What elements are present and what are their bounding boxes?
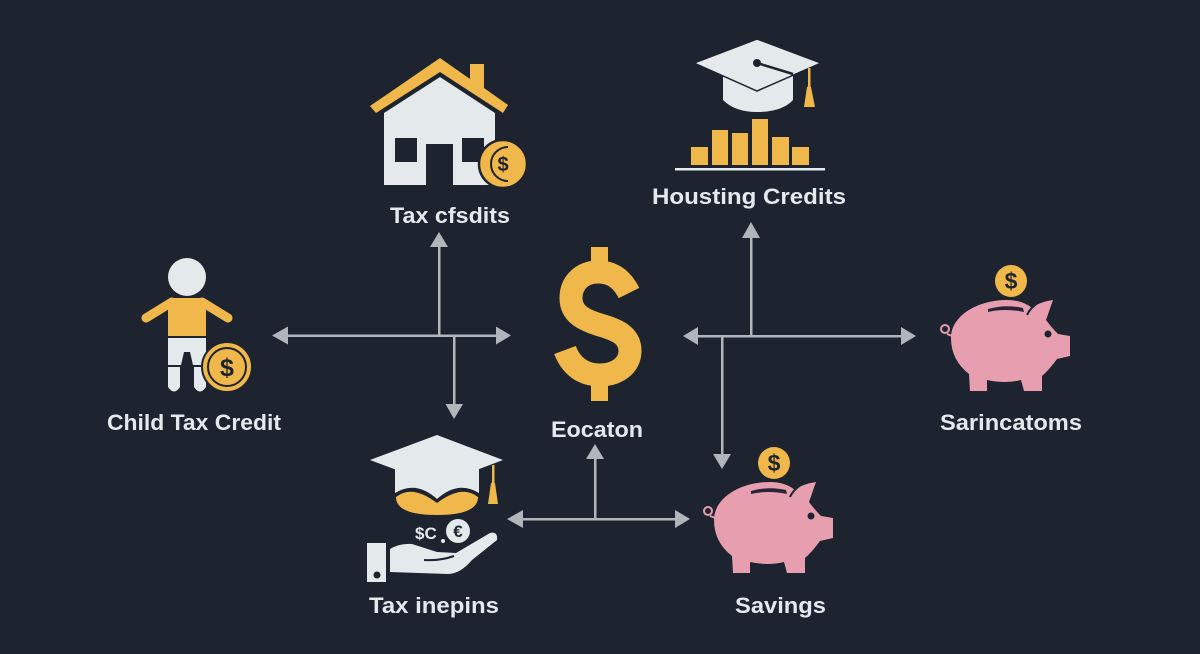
icon: graduation cap with hand and coins: $C (415, 524, 437, 543)
label: Sarincatoms: Sarincatoms (940, 410, 1082, 435)
label: Tax inepins: Tax inepins (369, 593, 499, 618)
icon: graduation cap with bar chart (675, 39, 825, 170)
icon: graduation cap with hand and coins: € (453, 522, 463, 541)
icon: graduation cap with hand and coins (367, 435, 503, 582)
label: Child Tax Credit: Child Tax Credit (107, 410, 282, 435)
icon: piggy bank center: $ (768, 450, 781, 476)
icon: house with coin (370, 58, 527, 188)
arrows: bottom cross (507, 444, 690, 528)
label: Eocaton: Eocaton (551, 417, 643, 442)
label: Tax cfsdits: Tax cfsdits (390, 203, 510, 228)
arrows: right cross (683, 222, 916, 469)
icon: house with coin: $ (497, 154, 509, 176)
icon: child with coin (146, 258, 252, 392)
icon: piggy bank center (704, 447, 833, 573)
arrows: left cross (272, 232, 511, 419)
icon: piggy bank right (941, 265, 1070, 391)
label: Housting Credits: Housting Credits (652, 184, 846, 209)
icon: child with coin: $ (220, 354, 234, 382)
label: Savings: Savings (735, 593, 826, 618)
icon: central dollar sign (565, 247, 630, 401)
icon: piggy bank right: $ (1005, 268, 1018, 294)
